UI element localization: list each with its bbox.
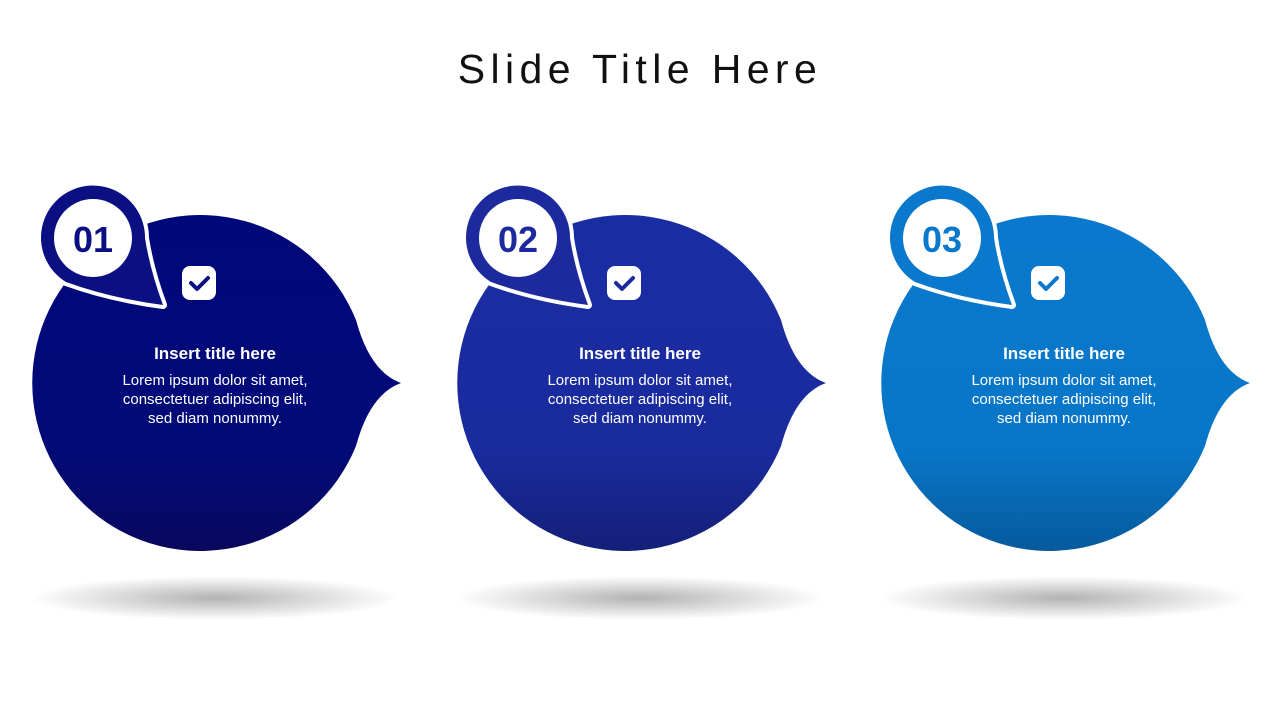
panel: step 02 — [455, 186, 826, 620]
pin: 03 — [890, 186, 1012, 305]
text block 01: sed diam nonummy. — [148, 410, 282, 427]
pin: 03: 03 — [922, 219, 962, 260]
pin: 01 — [41, 186, 163, 305]
text block 03 — [971, 344, 1157, 427]
panel: step 01 — [30, 186, 401, 620]
title: Slide Title Here — [458, 46, 822, 92]
text block 01: Insert title here — [154, 344, 276, 363]
text block 03: Insert title here — [1003, 344, 1125, 363]
pin: 02 — [466, 186, 588, 305]
text block 03: sed diam nonummy. — [997, 410, 1131, 427]
pin: 02: 02 — [498, 219, 538, 260]
text block 02: consectetuer adipiscing elit, — [548, 391, 732, 408]
text block 02 — [547, 344, 733, 427]
text block 03: consectetuer adipiscing elit, — [972, 391, 1156, 408]
text block 02: Lorem ipsum dolor sit amet, — [547, 372, 733, 389]
pin: 01: 01 — [73, 219, 113, 260]
text block 01 — [122, 344, 308, 427]
text block 02: Insert title here — [579, 344, 701, 363]
icon: check — [182, 266, 216, 300]
icon: check — [607, 266, 641, 300]
panel: step 03 — [879, 186, 1250, 620]
text block 03: Lorem ipsum dolor sit amet, — [971, 372, 1157, 389]
text block 01: consectetuer adipiscing elit, — [123, 391, 307, 408]
icon: check — [1031, 266, 1065, 300]
text block 02: sed diam nonummy. — [573, 410, 707, 427]
text block 01: Lorem ipsum dolor sit amet, — [122, 372, 308, 389]
